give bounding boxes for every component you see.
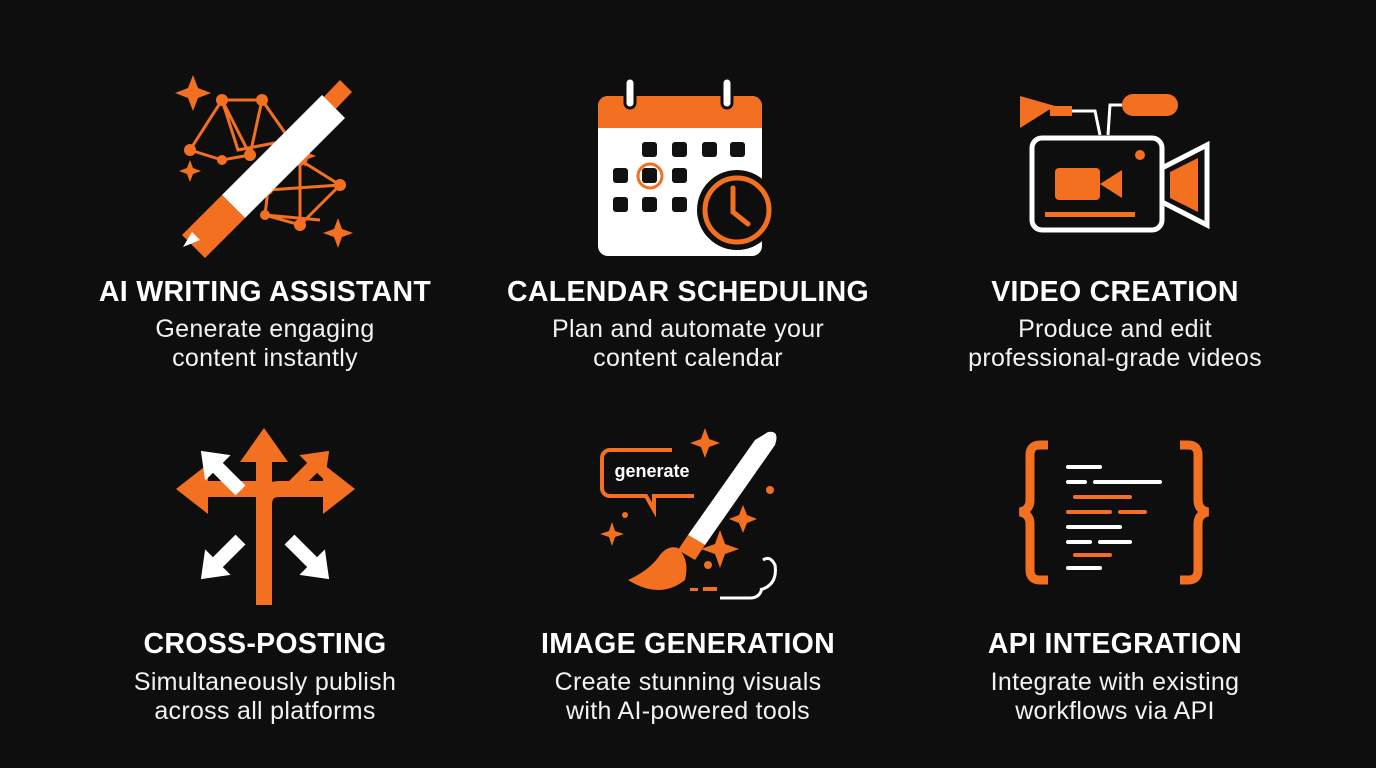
card text: API: workflows via API [1014,697,1215,725]
card text: AI writing [99,276,431,372]
card text: AI writing: AI WRITING ASSISTANT [99,276,431,308]
card text: video: professional-grade videos [968,344,1262,372]
card text: AI writing: content instantly [172,344,358,372]
card text: AI writing: Generate engaging [155,315,375,343]
icon: API braces code [1020,445,1208,580]
card text: video [968,276,1262,372]
icon: cross-posting arrows [176,428,355,605]
card text: image: Create stunning visuals [555,668,821,696]
card text: video: VIDEO CREATION [991,276,1239,308]
card text: calendar: CALENDAR SCHEDULING [507,276,869,308]
card text: cross-posting: CROSS-POSTING [143,628,387,660]
icon: AI writing pen [175,75,353,258]
card text: image: IMAGE GENERATION [541,628,835,660]
card text: calendar: content calendar [593,344,783,372]
icon: image generation brush [600,428,776,598]
icon: video camera [1020,94,1207,230]
card text: cross-posting [134,628,396,725]
icon: calendar with clock [598,78,777,256]
card text: video: Produce and edit [1018,315,1212,343]
card text: cross-posting: Simultaneously publish [134,668,396,696]
card text: API: API INTEGRATION [988,628,1242,660]
card text: calendar: Plan and automate your [552,315,824,343]
card text: image: with AI-powered tools [565,697,810,725]
card text: API: Integrate with existing [991,668,1239,696]
card text: API [988,628,1242,725]
card text: image [541,628,835,725]
icon: image generation brush: generate [614,461,690,481]
card text: calendar [507,276,869,372]
card text: cross-posting: across all platforms [154,697,376,725]
